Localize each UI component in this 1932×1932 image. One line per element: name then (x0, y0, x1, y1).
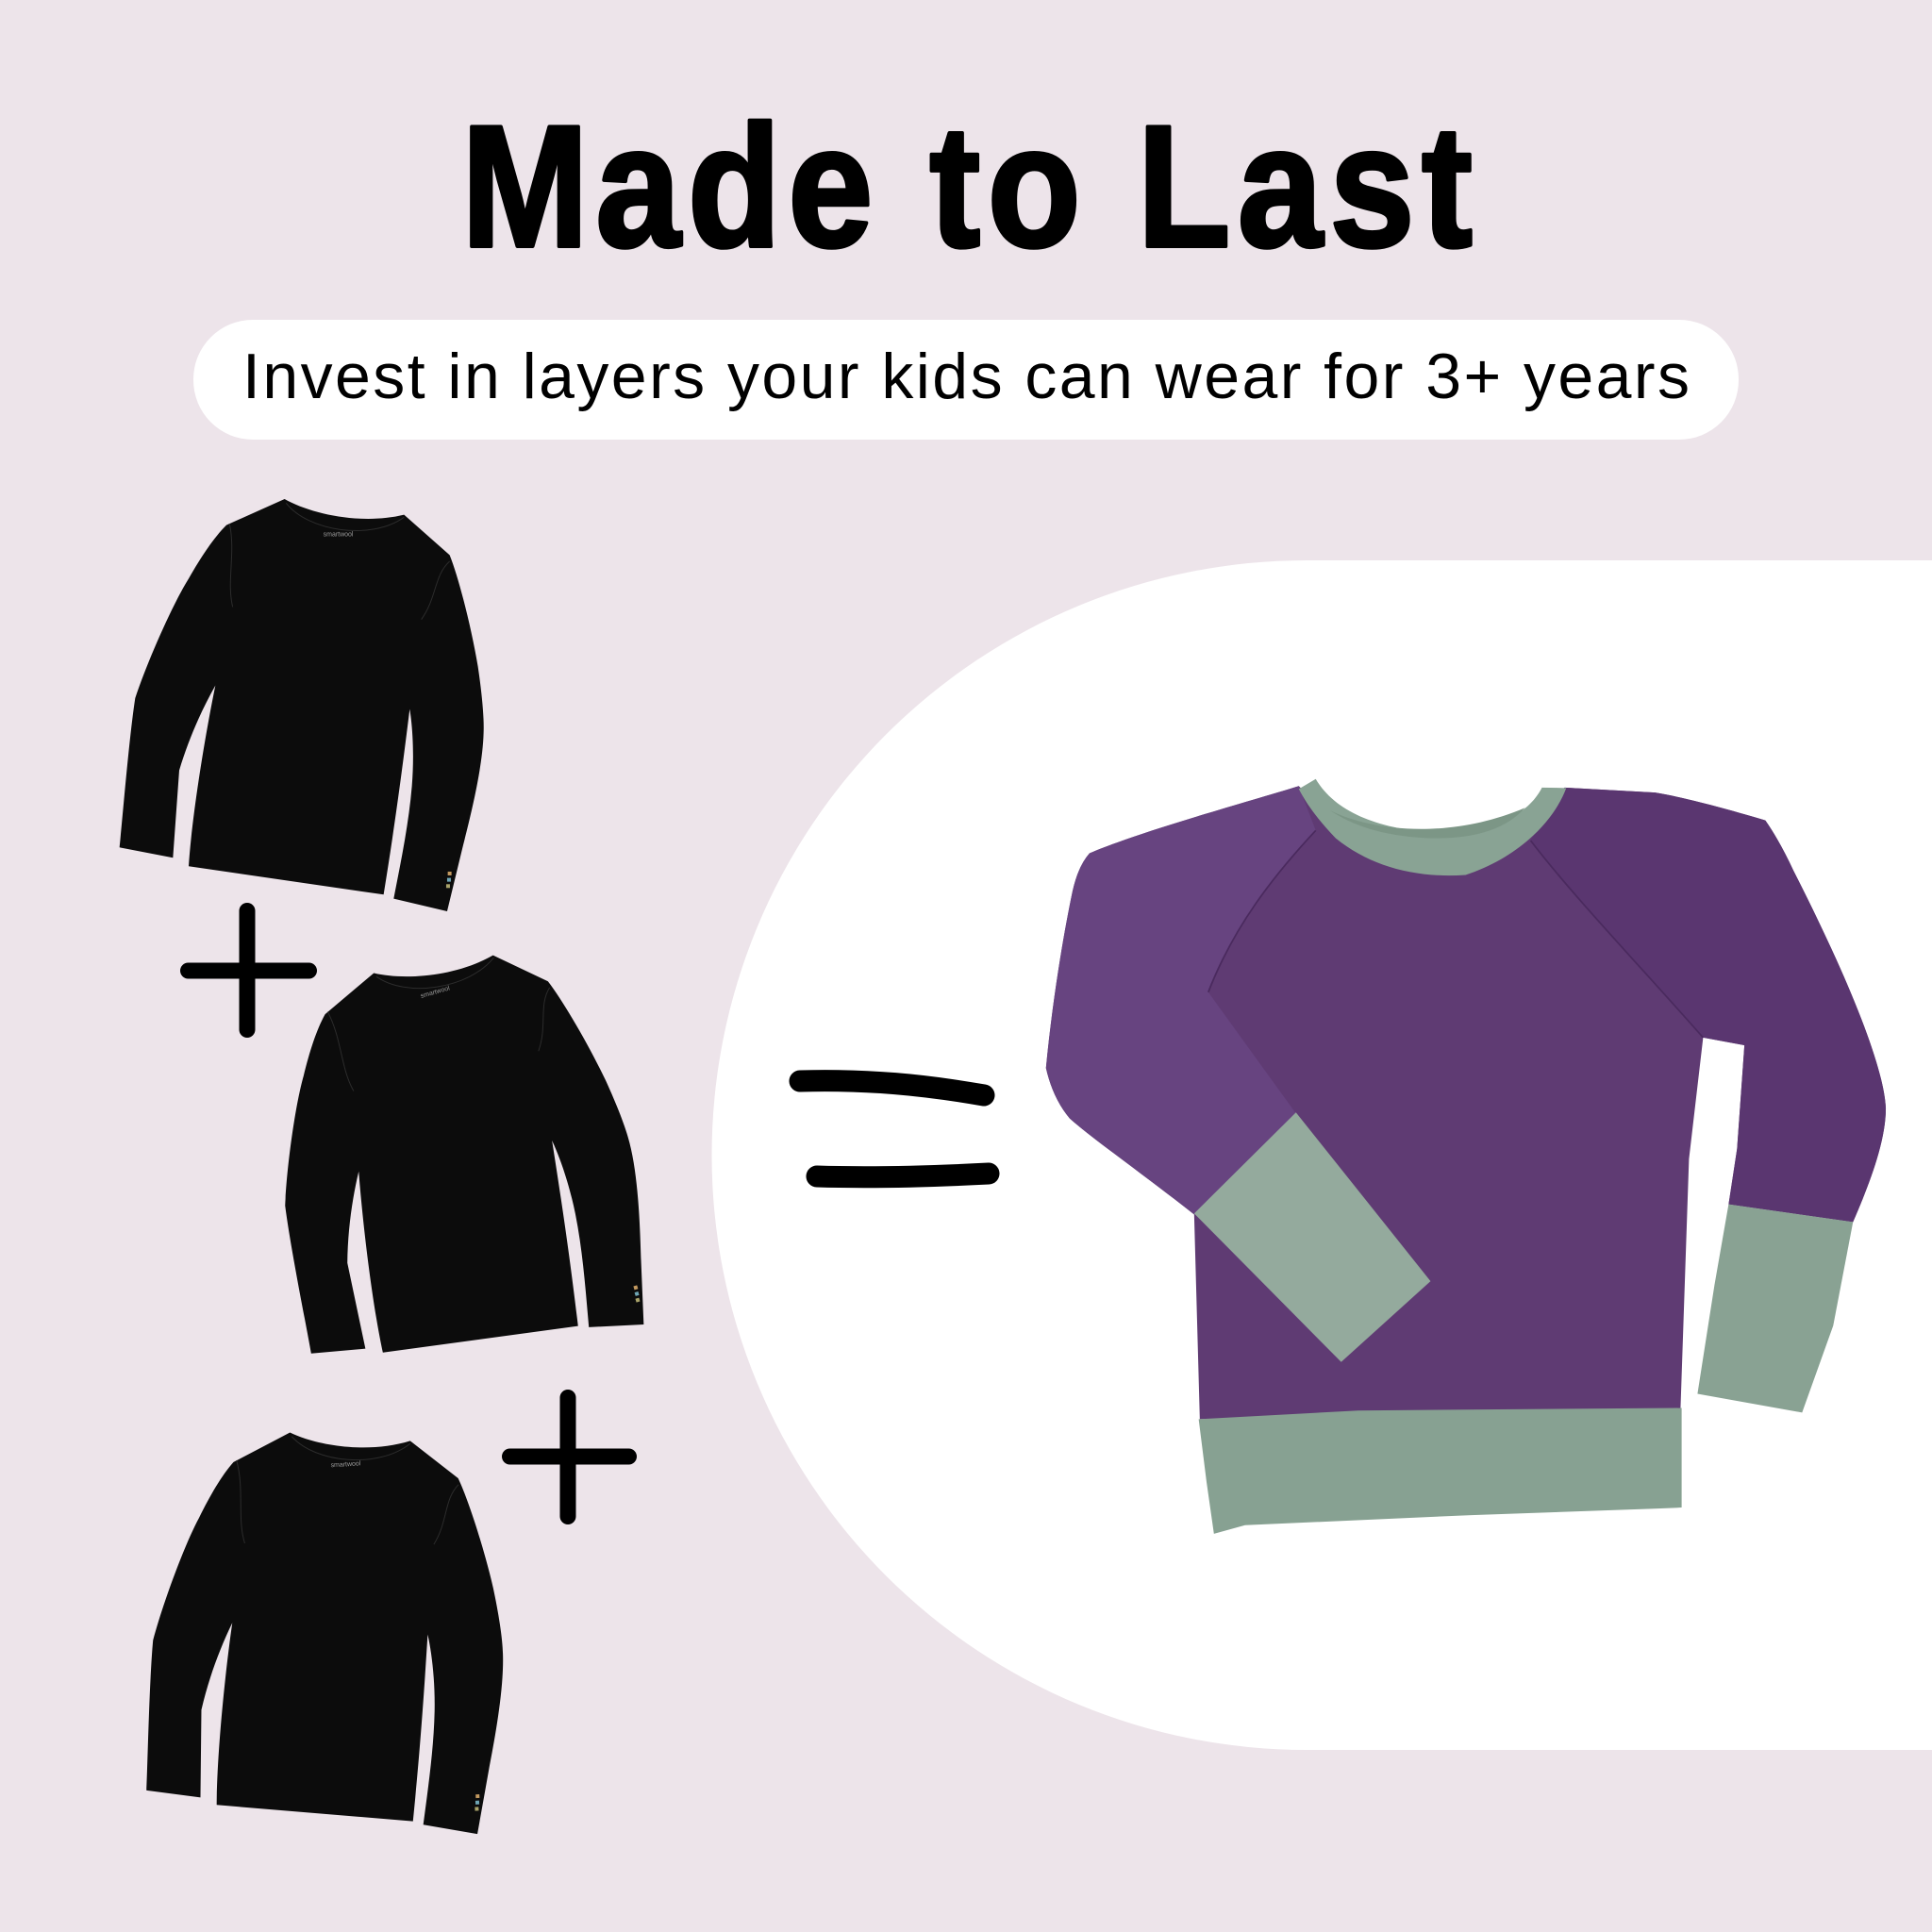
black shirt 1 (120, 499, 484, 911)
shirt body (1046, 786, 1886, 1419)
black shirt 3 (125, 1421, 514, 1854)
black shirt 3: smartwool (330, 1460, 361, 1469)
raglan seams (1208, 830, 1703, 1038)
right sleeve shading (1531, 788, 1886, 1222)
black shirt 1: smartwool (324, 531, 354, 538)
plus sign 2 (509, 1398, 628, 1517)
purple and green merino shirt (1046, 779, 1886, 1534)
collar (1299, 779, 1566, 875)
waist band (1199, 1408, 1682, 1534)
subtitle pill: Invest in layers your kids can wear for 3+ years (242, 341, 1690, 412)
left sleeve shading (1046, 786, 1316, 1214)
neck interior (1330, 808, 1525, 839)
plus sign 1 (189, 911, 309, 1030)
title: Made to Last (461, 89, 1473, 283)
black shirt 2 (215, 918, 679, 1415)
white rounded panel (711, 560, 1932, 1750)
right cuff (1697, 1205, 1853, 1412)
subtitle pill (193, 320, 1739, 440)
left cuff (1194, 1112, 1430, 1362)
equals sign (800, 1081, 989, 1177)
black shirt 2: smartwool (420, 985, 451, 1000)
